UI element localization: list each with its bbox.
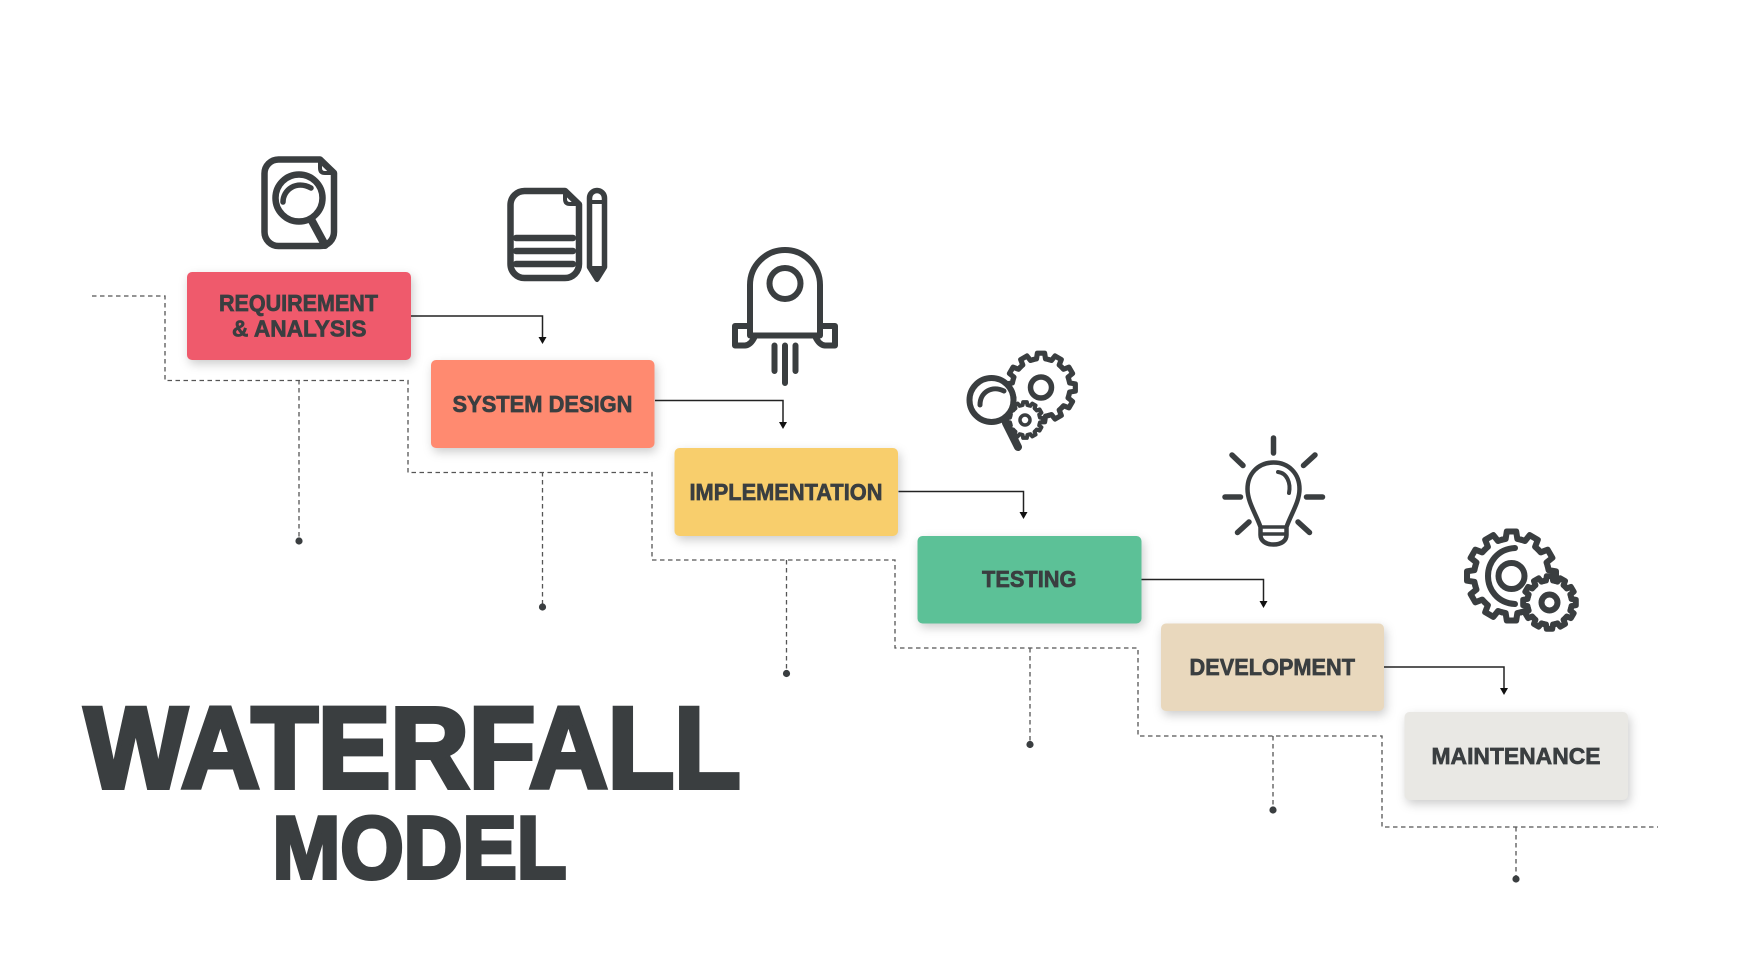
arrow: implementation to testing [898, 492, 1028, 519]
icon: light bulb [1225, 438, 1322, 544]
step 1: requirement and analysis: REQUIREMENT [219, 290, 379, 316]
icon: rocket [735, 250, 835, 383]
step 5: development [1161, 624, 1384, 711]
step 3: implementation: IMPLEMENTATION [690, 479, 882, 505]
step 3: implementation [674, 448, 898, 536]
dashed staircase line [92, 296, 1658, 827]
dashed drop line 5 with dot [1269, 736, 1277, 814]
arrow: requirement to system design [411, 316, 546, 344]
dashed drop line 3 with dot [783, 560, 790, 677]
icon: document and pencil [510, 191, 604, 280]
arrow: testing to development [1142, 580, 1268, 608]
dashed drop line 4 with dot [1026, 648, 1034, 748]
step 5: development: DEVELOPMENT [1190, 654, 1356, 680]
step 1: requirement and analysis [187, 272, 411, 360]
dashed drop line 2 with dot [539, 472, 546, 611]
title: model: MODEL [272, 798, 566, 897]
step 4: testing [918, 536, 1142, 624]
step 2: system design [431, 360, 654, 448]
icon: document with magnifier [264, 160, 334, 246]
title [84, 684, 740, 897]
step 6: maintenance [1404, 712, 1628, 800]
title: waterfall: WATERFALL [84, 684, 740, 812]
step 6: maintenance: MAINTENANCE [1432, 743, 1600, 769]
step 2: system design: SYSTEM DESIGN [452, 391, 632, 417]
arrow: system design to implementation [655, 400, 787, 429]
dashed drop line 6 with dot [1512, 827, 1520, 883]
step 1: requirement and analysis: & ANALYSIS [232, 316, 366, 342]
dashed drop line 1 with dot [295, 380, 303, 545]
icon: two gears [1467, 532, 1576, 629]
arrow: development to maintenance [1384, 667, 1508, 695]
icon: gears with magnifier [970, 353, 1075, 447]
step 4: testing: TESTING [982, 566, 1076, 592]
